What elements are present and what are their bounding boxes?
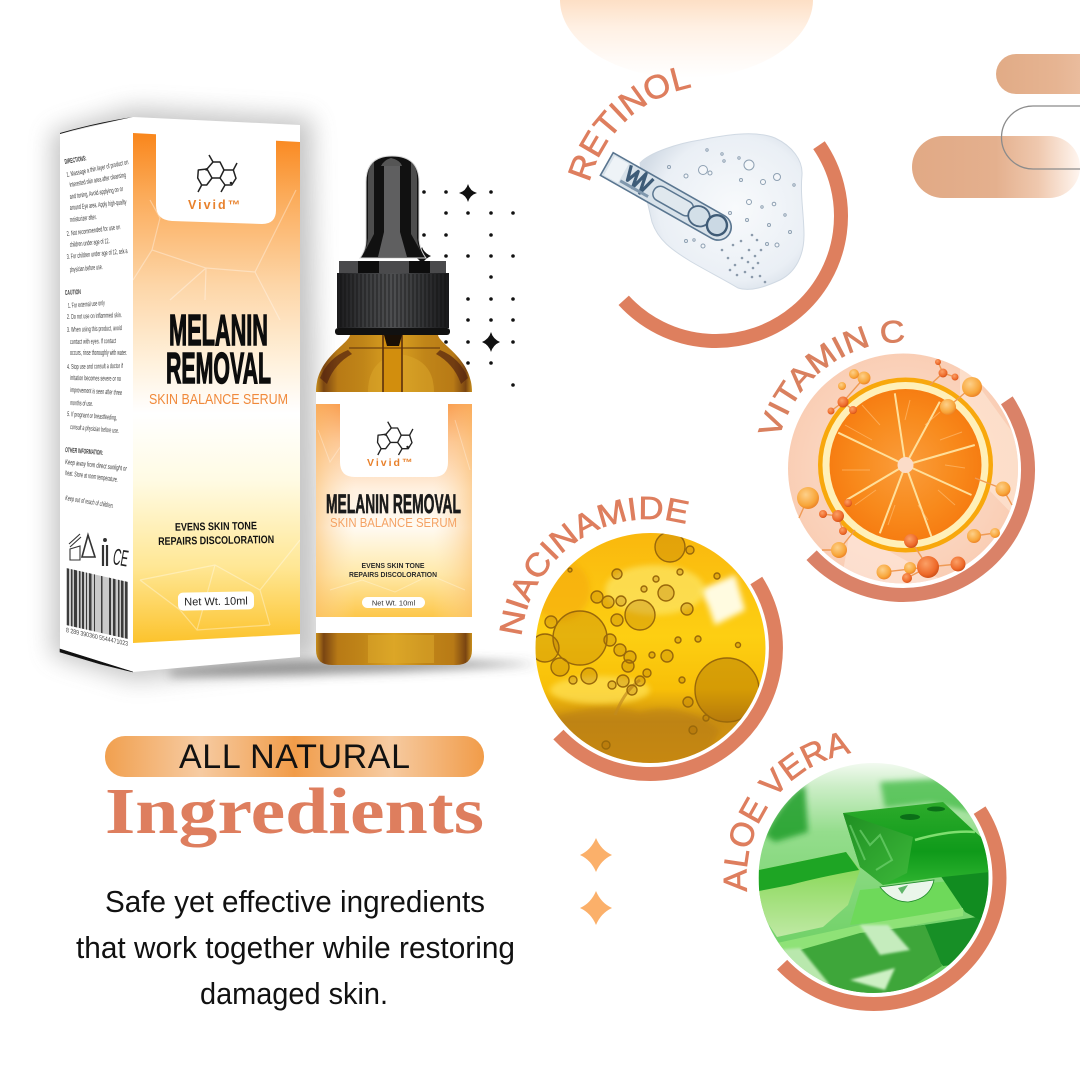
barcode: 8 289 390360 5544471023 <box>66 627 128 648</box>
icon: serum drop with bubbles <box>600 134 804 289</box>
box side panel: around Eye area. Apply high-quality <box>69 199 127 212</box>
box side panel: Keep away from direct sunlight or <box>65 459 128 473</box>
box title <box>166 306 271 393</box>
box logo tab: Vivid™ <box>188 198 242 212</box>
box side panel: 5. If pregnant or breastfeeding, <box>67 411 117 422</box>
box side panel: occurs, rinse thoroughly with water. <box>70 350 127 357</box>
arc <box>558 580 776 774</box>
box side panel: children under age of 12. <box>70 238 110 249</box>
box side panel: 3. When using this product, avoid <box>67 325 122 334</box>
regulatory icons: CE <box>111 543 130 572</box>
left leaf <box>759 852 860 937</box>
label claims: EVENS SKIN TONE <box>362 563 425 570</box>
arc <box>624 145 841 341</box>
box side panel: and toning. Avoid applying on or <box>69 186 124 201</box>
barcode <box>66 568 128 648</box>
box side panel: Keep out of reach of children. <box>65 495 114 510</box>
ingredient: niacinamide <box>499 496 783 781</box>
box net weight <box>178 591 254 611</box>
box side panel: improvement is seen after three <box>70 387 122 397</box>
box side panel: consult a physician before use. <box>70 424 119 435</box>
water drop <box>880 880 934 902</box>
orange sparkle icons <box>580 838 612 925</box>
box side panel: 3. For children under age of 12, ask a <box>67 248 128 261</box>
dot and star pattern behind bottle <box>413 184 515 387</box>
label logo tab <box>340 404 448 477</box>
niacinamide label: NIACINAMIDE <box>499 496 689 634</box>
decorative top peach half circle <box>560 0 813 78</box>
box side panel: 1. Massage a thin layer of product on <box>66 159 129 179</box>
ingredient: aloe vera <box>724 732 1006 1011</box>
box logo tab <box>156 130 276 224</box>
label claims: REPAIRS DISCOLORATION <box>349 572 437 579</box>
box claims: EVENS SKIN TONE <box>175 520 257 534</box>
body text: that work together while restoring <box>76 930 515 965</box>
box side panel: 2. Not recommended for use on <box>66 224 121 238</box>
vitamin c label: VITAMIN C <box>758 320 904 432</box>
product box <box>60 117 300 672</box>
ingredient: retinol <box>568 68 848 348</box>
box side panel: months of use. <box>70 400 93 408</box>
decorative pills top right <box>912 54 1080 198</box>
label subtitle: SKIN BALANCE SERUM <box>330 515 457 530</box>
box side panel: 1. For external use only <box>68 300 105 310</box>
regulatory icons <box>69 534 130 572</box>
icon: test tube <box>600 153 736 245</box>
box side panel: contact with eyes. If contact <box>70 338 116 346</box>
box side panel <box>60 117 133 672</box>
box side panel: 2. Do not use on inflammed skin. <box>67 312 122 321</box>
icon: orange slice with molecules <box>788 354 1018 590</box>
aloe vera label: ALOE VERA <box>724 732 852 892</box>
badge: all natural: ALL NATURAL <box>179 738 410 776</box>
bottle label <box>316 404 472 617</box>
bottle cap <box>335 261 450 335</box>
box side panel: physician before use. <box>70 264 103 274</box>
amber glass shoulder <box>316 335 472 392</box>
box side panel: interested skin area after cleansing <box>69 172 127 189</box>
box front panel: REMOVAL <box>166 344 271 393</box>
label claims <box>349 563 437 579</box>
white label band <box>316 392 472 633</box>
label net weight: Net Wt. 10ml <box>372 598 416 608</box>
retinol label: RETINOL <box>568 68 692 180</box>
box subtitle: SKIN BALANCE SERUM <box>149 392 288 408</box>
box net weight: Net Wt. 10ml <box>184 595 248 609</box>
box claims: REPAIRS DISCOLORATION <box>158 534 274 548</box>
lower leaves <box>775 870 1000 995</box>
label title: MELANIN REMOVAL <box>326 489 461 519</box>
box side panel: moisturizer after. <box>69 214 97 224</box>
box side panel: CAUTION <box>65 289 81 297</box>
arc <box>812 400 1028 595</box>
box side panel: heat. Store at room temperature. <box>65 470 118 484</box>
soft box shadow <box>52 108 320 680</box>
amber glass base <box>316 633 472 665</box>
arc <box>782 810 999 1004</box>
box side panel: DIRECTIONS: <box>64 155 87 166</box>
ground shadow <box>170 659 540 676</box>
body text: Safe yet effective ingredients <box>105 884 485 919</box>
cut leaf <box>843 802 990 885</box>
box side panel: 4. Stop use and consult a doctor if <box>67 363 123 371</box>
icon: oil bubbles <box>530 532 766 770</box>
badge: all natural <box>105 736 484 777</box>
body text: damaged skin. <box>200 976 388 1011</box>
box side panel: irritation becomes severe or no <box>70 375 121 383</box>
box side panel: OTHER INFORMATION: <box>65 447 103 457</box>
box front panel <box>133 117 300 672</box>
label net weight <box>362 597 425 608</box>
ingredient: vitamin c <box>758 320 1036 602</box>
molecules <box>797 359 1012 583</box>
serum bottle <box>316 156 472 665</box>
label logo tab: Vivid™ <box>367 457 414 469</box>
body text <box>76 884 515 1011</box>
dropper bulb <box>360 156 426 258</box>
icon: aloe leaves <box>758 763 1000 995</box>
heading: ingredients: Ingredients <box>105 775 484 848</box>
box claims <box>158 520 274 548</box>
box title: MELANIN <box>169 306 268 355</box>
